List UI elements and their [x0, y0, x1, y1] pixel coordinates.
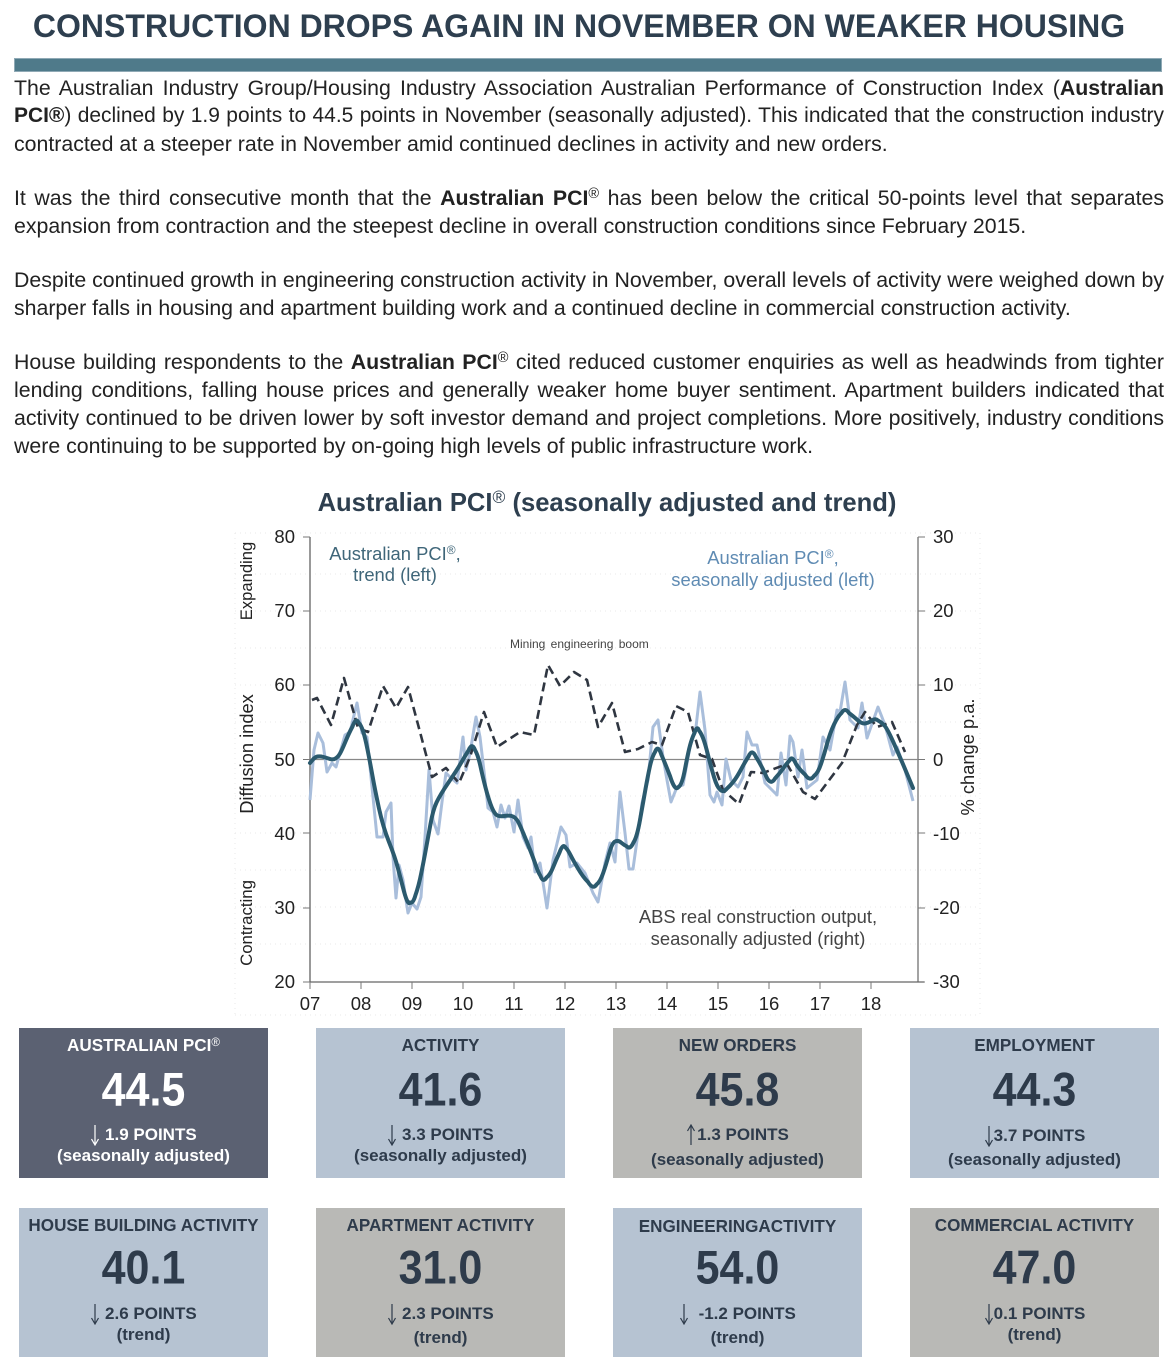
legend label: ABS output: seasonally adjusted (right) [651, 928, 865, 949]
x axis [300, 982, 924, 1014]
paragraph 1: The Australian Industry Group/Housing Industry Association Australian Performance of Construction Index (Australian [14, 76, 1164, 100]
card: activity [316, 1028, 565, 1178]
right axis: -30 [933, 971, 960, 992]
title rule bar [14, 58, 1162, 72]
x axis: 10 [453, 993, 473, 1014]
right axis: 30 [933, 526, 954, 547]
right axis: -10 [933, 823, 960, 844]
card: commercial activity: (trend) [1008, 1325, 1061, 1344]
card: new orders [613, 1028, 862, 1178]
x axis: 09 [402, 993, 422, 1014]
legend label: seasonally adjusted: seasonally adjusted (left) [671, 569, 875, 590]
x axis: 18 [861, 993, 881, 1014]
card: employment: (seasonally adjusted) [948, 1150, 1121, 1169]
left axis [274, 526, 310, 992]
paragraph 3 [14, 268, 1164, 320]
card: Australian PCI [19, 1028, 268, 1178]
card: new orders: 1.3 POINTS [697, 1125, 789, 1144]
right axis [918, 526, 960, 992]
card: house building activity [19, 1208, 268, 1357]
axis label: diffusion index: Diffusion index [236, 694, 257, 814]
x axis: 16 [759, 993, 779, 1014]
x axis: 08 [351, 993, 371, 1014]
card: apartment activity [316, 1208, 565, 1357]
card: engineering activity: -1.2 POINTS [699, 1304, 796, 1323]
card: house building activity: 2.6 POINTS [105, 1304, 197, 1323]
card: Australian PCI: 1.9 POINTS [105, 1125, 197, 1144]
legend label: trend: trend (left) [353, 564, 437, 585]
x axis: 07 [300, 993, 320, 1014]
x axis: 11 [504, 993, 524, 1014]
card: apartment activity: (trend) [414, 1328, 467, 1347]
annotation: mining engineering boom: Mining engineering boom [510, 637, 649, 651]
card: house building activity: (trend) [117, 1325, 170, 1344]
card: new orders: (seasonally adjusted) [651, 1150, 824, 1169]
card: Australian PCI: (seasonally adjusted) [57, 1146, 230, 1165]
card: engineering activity [613, 1208, 862, 1357]
right axis: -20 [933, 897, 960, 918]
legend label: seasonally adjusted [671, 547, 875, 590]
left axis: 50 [274, 749, 295, 770]
axis label: contracting: Contracting [237, 880, 256, 966]
left axis: 80 [274, 526, 295, 547]
left axis: 30 [274, 897, 295, 918]
card: engineering activity: 54.0 [696, 1242, 779, 1294]
paragraph 4: lending conditions, falling house prices and generally weaker home buyer sentiment. Apartment builders indicated that [14, 378, 1164, 402]
paragraph 3: Despite continued growth in engineering construction activity in November, overall levels of activity were weighed down by [14, 268, 1164, 292]
x axis: 12 [555, 993, 575, 1014]
card: Australian PCI: 44.5 [102, 1064, 185, 1116]
legend label: ABS output [639, 906, 877, 949]
left axis: 20 [274, 971, 295, 992]
legend label: ABS output: ABS real construction output, [639, 906, 877, 927]
series: PCI seasonally adjusted [310, 682, 913, 913]
card: Australian PCI: AUSTRALIAN PCI® [67, 1036, 220, 1055]
card: house building activity: 40.1 [102, 1242, 185, 1294]
paragraph 3: sharper falls in housing and apartment building work and a continued decline in commercial construction activity. [14, 296, 1071, 320]
card: activity: 3.3 POINTS [402, 1125, 494, 1144]
series: ABS real construction output (dashed) [312, 665, 905, 804]
card: employment [910, 1028, 1159, 1178]
left axis: 40 [274, 823, 295, 844]
card: employment: 3.7 POINTS [994, 1126, 1085, 1145]
paragraph 1: contracted at a steeper rate in November amid continued declines in activity and new orders. [14, 132, 888, 156]
x axis: 14 [657, 993, 677, 1014]
paragraph 1 [14, 76, 1164, 156]
card: apartment activity: 2.3 POINTS [402, 1304, 494, 1323]
card: activity: 41.6 [399, 1064, 482, 1116]
card: apartment activity: 31.0 [399, 1242, 482, 1294]
chart title: Australian PCI® (seasonally adjusted and trend) [318, 487, 896, 517]
x axis: 17 [810, 993, 830, 1014]
card: house building activity: HOUSE BUILDING ACTIVITY [28, 1216, 259, 1235]
card: apartment activity: APARTMENT ACTIVITY [346, 1216, 535, 1235]
legend label: seasonally adjusted: , [834, 547, 839, 568]
series: PCI trend [310, 710, 913, 903]
paragraph 2: It was the third consecutive month that the Australian PCI® has been below the critical 50-points level that separates [14, 186, 1164, 210]
legend label: trend: ® [447, 543, 456, 557]
paragraph 2 [14, 186, 1164, 238]
card: engineering activity: (trend) [711, 1328, 764, 1347]
legend label: seasonally adjusted: Australian PCI [707, 547, 825, 568]
x axis: 15 [708, 993, 728, 1014]
legend label: trend [329, 543, 461, 585]
card: commercial activity: 0.1 POINTS [994, 1304, 1085, 1323]
axis label: percent change: % change p.a. [957, 699, 978, 815]
right axis: 10 [933, 674, 954, 695]
card: new orders: NEW ORDERS [679, 1036, 796, 1055]
paragraph 2: expansion from contraction and the steepest decline in overall construction conditions since February 2015. [14, 214, 1026, 238]
card: commercial activity [910, 1208, 1159, 1357]
card: employment: EMPLOYMENT [974, 1036, 1095, 1055]
line chart: Australian PCI and ABS construction output [234, 526, 980, 1016]
left axis: 60 [274, 674, 295, 695]
card: employment: 44.3 [993, 1064, 1076, 1116]
right axis: 20 [933, 600, 954, 621]
paragraph 4: were continuing to be supported by on-going high levels of public infrastructure work. [14, 434, 813, 458]
card: engineering activity: ENGINEERINGACTIVITY [639, 1217, 836, 1236]
card: activity: (seasonally adjusted) [354, 1146, 527, 1165]
paragraph 4: House building respondents to the Australian PCI® cited reduced customer enquiries as well as headwinds from tighter [14, 350, 1164, 374]
left axis: 70 [274, 600, 295, 621]
card: new orders: 45.8 [696, 1064, 779, 1116]
axis label: expanding: Expanding [237, 542, 256, 620]
paragraph 1: PCI®) declined by 1.9 points to 44.5 points in November (seasonally adjusted). This indicated that the construction industry [14, 104, 1164, 127]
card: activity: ACTIVITY [402, 1036, 479, 1055]
legend label: trend: , [456, 543, 461, 564]
title: CONSTRUCTION DROPS AGAIN IN NOVEMBER ON WEAKER HOUSING [33, 8, 1125, 44]
right axis: 0 [933, 749, 943, 770]
x axis: 13 [606, 993, 626, 1014]
paragraph 4 [14, 350, 1164, 458]
50-point reference line [310, 758, 918, 760]
card: commercial activity: COMMERCIAL ACTIVITY [935, 1216, 1134, 1235]
card: commercial activity: 47.0 [993, 1242, 1076, 1294]
legend label: seasonally adjusted: ® [825, 547, 834, 561]
text block: introduction paragraphs [14, 76, 1164, 458]
legend label: trend: Australian PCI [329, 543, 447, 564]
paragraph 4: activity continued to be driven lower by soft investor demand and project completions. More positively, industry conditions [14, 406, 1164, 430]
